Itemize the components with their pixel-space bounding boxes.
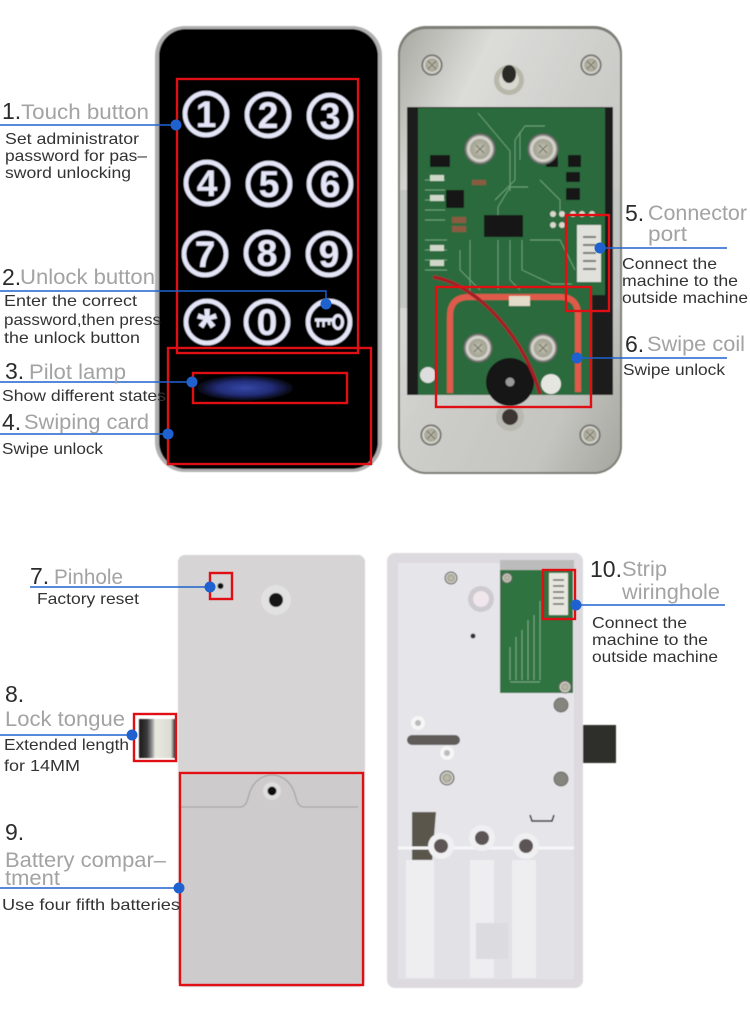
top post — [494, 65, 524, 95]
connector — [577, 225, 601, 282]
callout 9: battery compartment: Use four fifth batteries — [2, 897, 180, 914]
keypad buttons: 1 — [196, 94, 216, 135]
connector — [549, 573, 568, 615]
callout 9: battery compartment: Battery compar– — [5, 849, 166, 872]
mount post — [468, 586, 494, 638]
callout 6: swipe coil: Swipe unlock — [623, 362, 726, 379]
mount hole — [261, 585, 291, 615]
callout 2: unlock button: Unlock button — [20, 266, 155, 289]
callout 4: swiping card — [0, 409, 174, 458]
callout 3: pilot lamp: Show different states — [2, 388, 166, 405]
callout 1: touch button: sword unlocking — [5, 165, 131, 182]
panel: circuit board back view — [398, 26, 622, 474]
callout 2: unlock button: 2. — [2, 264, 21, 290]
callout 2: unlock button: Enter the correct — [4, 293, 138, 310]
callout 10: strip wiring hole: outside machine — [592, 649, 718, 666]
callout 2: unlock button: the unlock button — [4, 330, 140, 347]
callout 6: swipe coil — [572, 331, 745, 379]
icon: key — [315, 316, 342, 328]
callout 4: swiping card: Swipe unlock — [2, 441, 104, 458]
callout 6: swipe coil: 6. — [625, 331, 644, 357]
board components — [430, 155, 581, 266]
screws — [421, 55, 601, 445]
keypad buttons: 8 — [257, 233, 277, 274]
callout 5: connector port: Connect the — [622, 256, 717, 273]
callout 1: touch button: password for pas– — [5, 148, 147, 165]
keypad buttons: 7 — [195, 234, 215, 275]
callout 5: connector port: Connector — [648, 202, 747, 225]
keypad buttons: 2 — [258, 95, 278, 136]
callout 10: strip wiring hole: Strip — [622, 558, 667, 581]
callout 3: pilot lamp: Pilot lamp — [29, 361, 126, 384]
callout 7: pinhole: Factory reset — [37, 591, 140, 608]
callout 9: battery compartment: 9. — [5, 819, 24, 845]
callout 5: connector port: outside machine — [622, 290, 748, 307]
slot and pegs — [407, 716, 460, 760]
side tongue — [582, 725, 616, 763]
callout 10: strip wiring hole: machine to the — [592, 632, 708, 649]
callout 8: lock tongue: for 14MM — [4, 758, 80, 775]
callout 1: touch button: 1. — [2, 98, 21, 124]
callout 8: lock tongue: 8. — [5, 681, 24, 707]
callout 5: connector port — [594, 200, 748, 307]
keypad buttons: 6 — [320, 164, 340, 205]
connector header pins — [550, 211, 595, 228]
pinhole — [218, 583, 224, 589]
callout 7: pinhole: 7. — [30, 563, 49, 589]
callout 3: pilot lamp — [0, 358, 198, 405]
keypad buttons: 3 — [320, 96, 340, 137]
callout 10: strip wiring hole: 10. — [590, 556, 622, 582]
keypad buttons: * — [197, 299, 218, 357]
keypad buttons: 5 — [259, 164, 279, 205]
keypad buttons — [184, 93, 351, 357]
callout 7: pinhole — [30, 563, 216, 608]
screws — [440, 572, 571, 786]
board traces — [425, 113, 575, 300]
bottom hole — [496, 403, 524, 431]
callout 1: touch button: Set administrator — [5, 131, 140, 148]
red highlight boxes — [134, 79, 609, 985]
callout 8: lock tongue — [0, 681, 138, 775]
callout 8: lock tongue: Extended length — [4, 737, 129, 754]
panel: keypad front view — [155, 26, 382, 472]
battery bay — [398, 812, 574, 979]
callout 1: touch button: Touch button — [21, 101, 149, 124]
callout 9: battery compartment — [0, 819, 184, 914]
callout 10: strip wiring hole: wiringhole — [621, 581, 720, 604]
traces — [510, 601, 540, 682]
callout 4: swiping card: 4. — [2, 409, 21, 435]
callout 4: swiping card: Swiping card — [24, 411, 149, 434]
callout 10: strip wiring hole — [570, 556, 725, 666]
callout 7: pinhole: Pinhole — [54, 566, 123, 589]
panel: white back cover — [139, 555, 365, 987]
callout 8: lock tongue: Lock tongue — [5, 708, 125, 731]
callout 5: connector port: port — [648, 223, 687, 246]
callout 1: touch button — [0, 98, 182, 182]
callout 5: connector port: machine to the — [622, 273, 738, 290]
swipe coil — [433, 277, 578, 394]
panel: open back housing — [387, 553, 616, 988]
callout 5: connector port: 5. — [625, 200, 644, 226]
callout 9: battery compartment: tment — [5, 867, 60, 890]
lock tongue — [139, 719, 176, 758]
callout 3: pilot lamp: 3. — [5, 358, 24, 384]
buzzer — [420, 358, 561, 406]
callout 10: strip wiring hole: Connect the — [592, 615, 687, 632]
pilot lamp glow — [195, 375, 295, 401]
keypad buttons: 4 — [197, 163, 218, 204]
callout 2: unlock button: password,then press — [4, 312, 161, 329]
keypad buttons: 0 — [257, 302, 277, 343]
battery cover — [180, 775, 361, 984]
callout 2: unlock button — [0, 264, 332, 347]
callout 6: swipe coil: Swipe coil — [647, 333, 745, 356]
keypad buttons: 9 — [319, 234, 339, 275]
